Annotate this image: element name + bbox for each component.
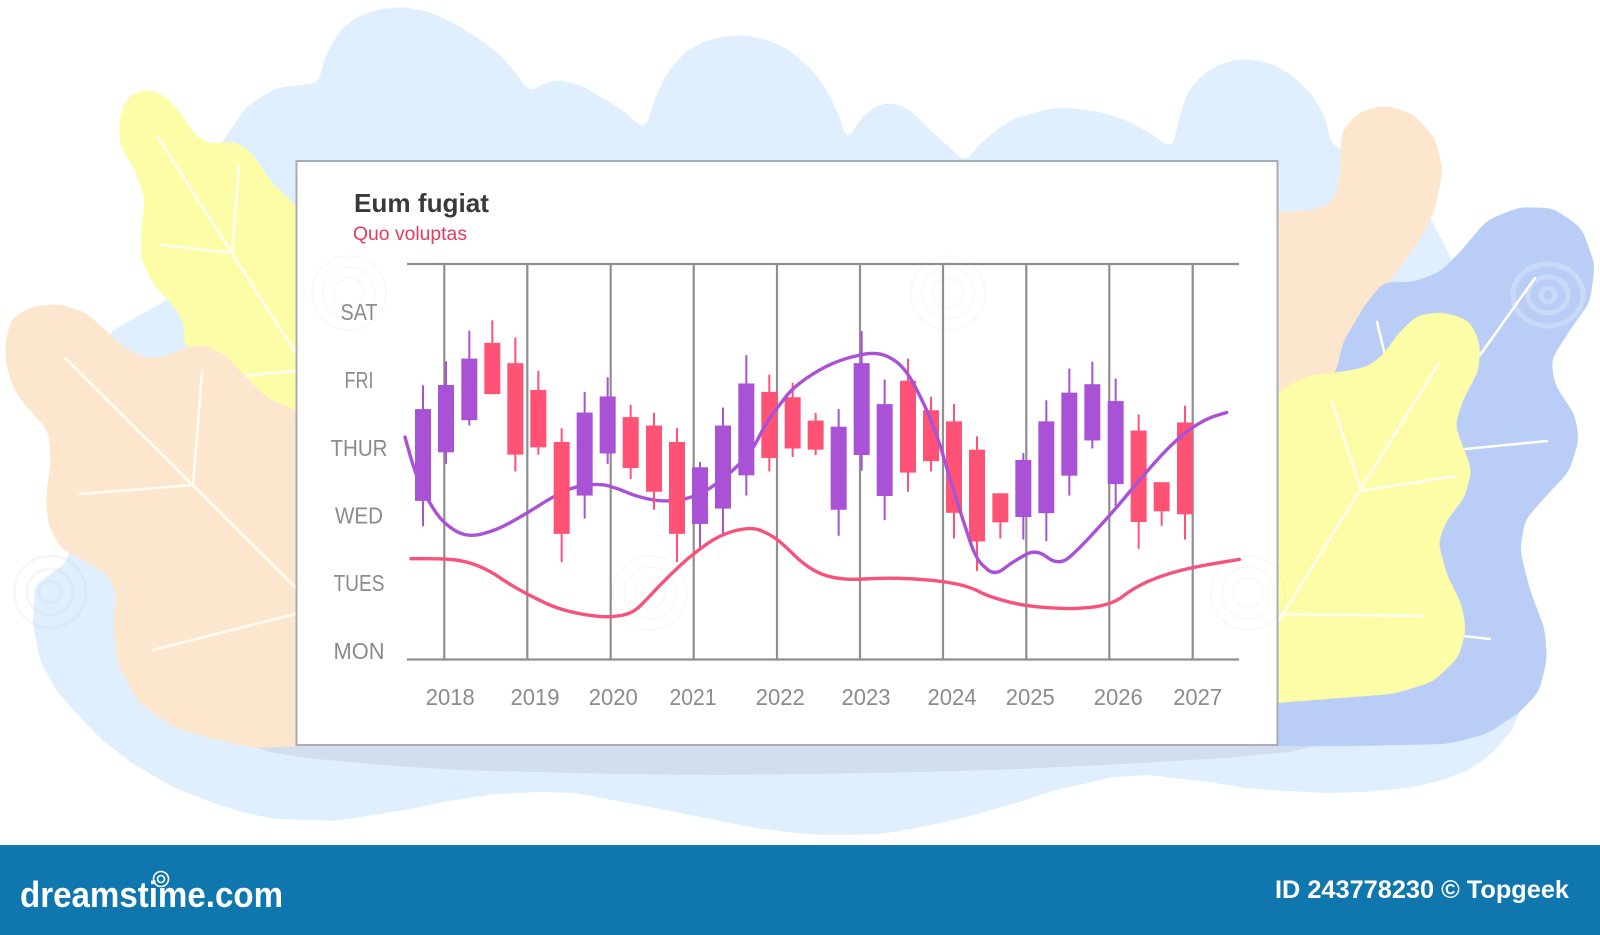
x axis labels: 2020 bbox=[589, 684, 638, 710]
candle 26 bbox=[992, 493, 1008, 538]
candle 2 bbox=[438, 361, 454, 464]
candle 17 bbox=[785, 383, 801, 457]
x axis labels: 2024 bbox=[928, 684, 977, 710]
candle 5 bbox=[507, 338, 523, 471]
candle 3 bbox=[461, 331, 477, 426]
candle 25 bbox=[969, 436, 985, 571]
x axis labels: 2018 bbox=[426, 684, 475, 710]
candle 20 bbox=[854, 331, 870, 471]
candle 23 bbox=[923, 397, 939, 471]
watermark spirals bbox=[14, 256, 1583, 630]
x axis labels: 2021 bbox=[670, 684, 716, 710]
candle 15 bbox=[738, 355, 754, 496]
purple trend line, first part behind candles bbox=[405, 437, 702, 535]
candle 34 bbox=[1177, 406, 1193, 540]
leaf: peach left bbox=[5, 304, 340, 748]
purple trend line, second part over candles bbox=[702, 353, 1227, 572]
candle 22 bbox=[900, 359, 916, 492]
x axis labels: 2025 bbox=[1006, 684, 1055, 710]
x axis labels: 2026 bbox=[1094, 684, 1143, 710]
chart plot: lines and candlesticks bbox=[405, 320, 1239, 617]
candle 28 bbox=[1038, 400, 1054, 541]
candle 24 bbox=[946, 404, 962, 538]
panel subtitle: Quo voluptas bbox=[353, 224, 467, 245]
leaf: peach right bbox=[1240, 105, 1443, 420]
chart grid bbox=[407, 264, 1239, 660]
footer credit: ID 243778230 © Topgeek bbox=[1275, 876, 1569, 904]
candle 13 bbox=[692, 462, 708, 548]
y axis labels: FRI bbox=[344, 367, 374, 393]
panel ground shadow bbox=[230, 738, 1347, 775]
candle 16 bbox=[761, 375, 777, 471]
candle 32 bbox=[1131, 414, 1147, 549]
leaf: periwinkle right bbox=[1240, 207, 1595, 746]
candle 21 bbox=[877, 380, 893, 520]
chart panel bbox=[296, 161, 1278, 745]
red trend line bbox=[411, 529, 1239, 617]
x axis labels: 2022 bbox=[756, 684, 805, 710]
candle 19 bbox=[831, 409, 847, 536]
candle 7 bbox=[554, 428, 570, 562]
panel title: Eum fugiat bbox=[354, 188, 489, 218]
candle 12 bbox=[669, 428, 685, 562]
candle 29 bbox=[1061, 369, 1077, 496]
y axis labels: MON bbox=[334, 638, 384, 664]
leaf: yellow left bbox=[118, 89, 340, 430]
x axis labels: 2023 bbox=[842, 684, 890, 710]
candle 30 bbox=[1084, 362, 1100, 449]
candle 6 bbox=[530, 371, 546, 455]
candle 31 bbox=[1108, 378, 1124, 506]
y axis labels: WED bbox=[335, 502, 383, 528]
leaf: yellow right bbox=[1240, 312, 1480, 706]
candle 18 bbox=[808, 413, 824, 455]
candle 1 bbox=[415, 385, 431, 526]
candle 27 bbox=[1015, 453, 1031, 540]
candle 9 bbox=[600, 377, 616, 464]
candle 8 bbox=[577, 392, 593, 519]
footer logo: dreamstime.com: dreamstime.com bbox=[20, 874, 283, 915]
candle 10 bbox=[623, 405, 639, 479]
candlesticks bbox=[415, 320, 1193, 571]
y axis labels bbox=[330, 299, 388, 664]
footer bar bbox=[0, 845, 1600, 935]
y axis labels: SAT bbox=[340, 299, 378, 325]
y axis labels: THUR bbox=[330, 435, 388, 461]
x axis labels: 2019 bbox=[510, 684, 560, 710]
x axis labels: 2027 bbox=[1173, 684, 1222, 710]
candle 4 bbox=[484, 320, 500, 394]
x axis labels bbox=[426, 684, 1222, 710]
y axis labels: TUES bbox=[334, 570, 384, 596]
candle 11 bbox=[646, 413, 662, 510]
candle 33 bbox=[1154, 482, 1170, 526]
candle 14 bbox=[715, 408, 731, 535]
